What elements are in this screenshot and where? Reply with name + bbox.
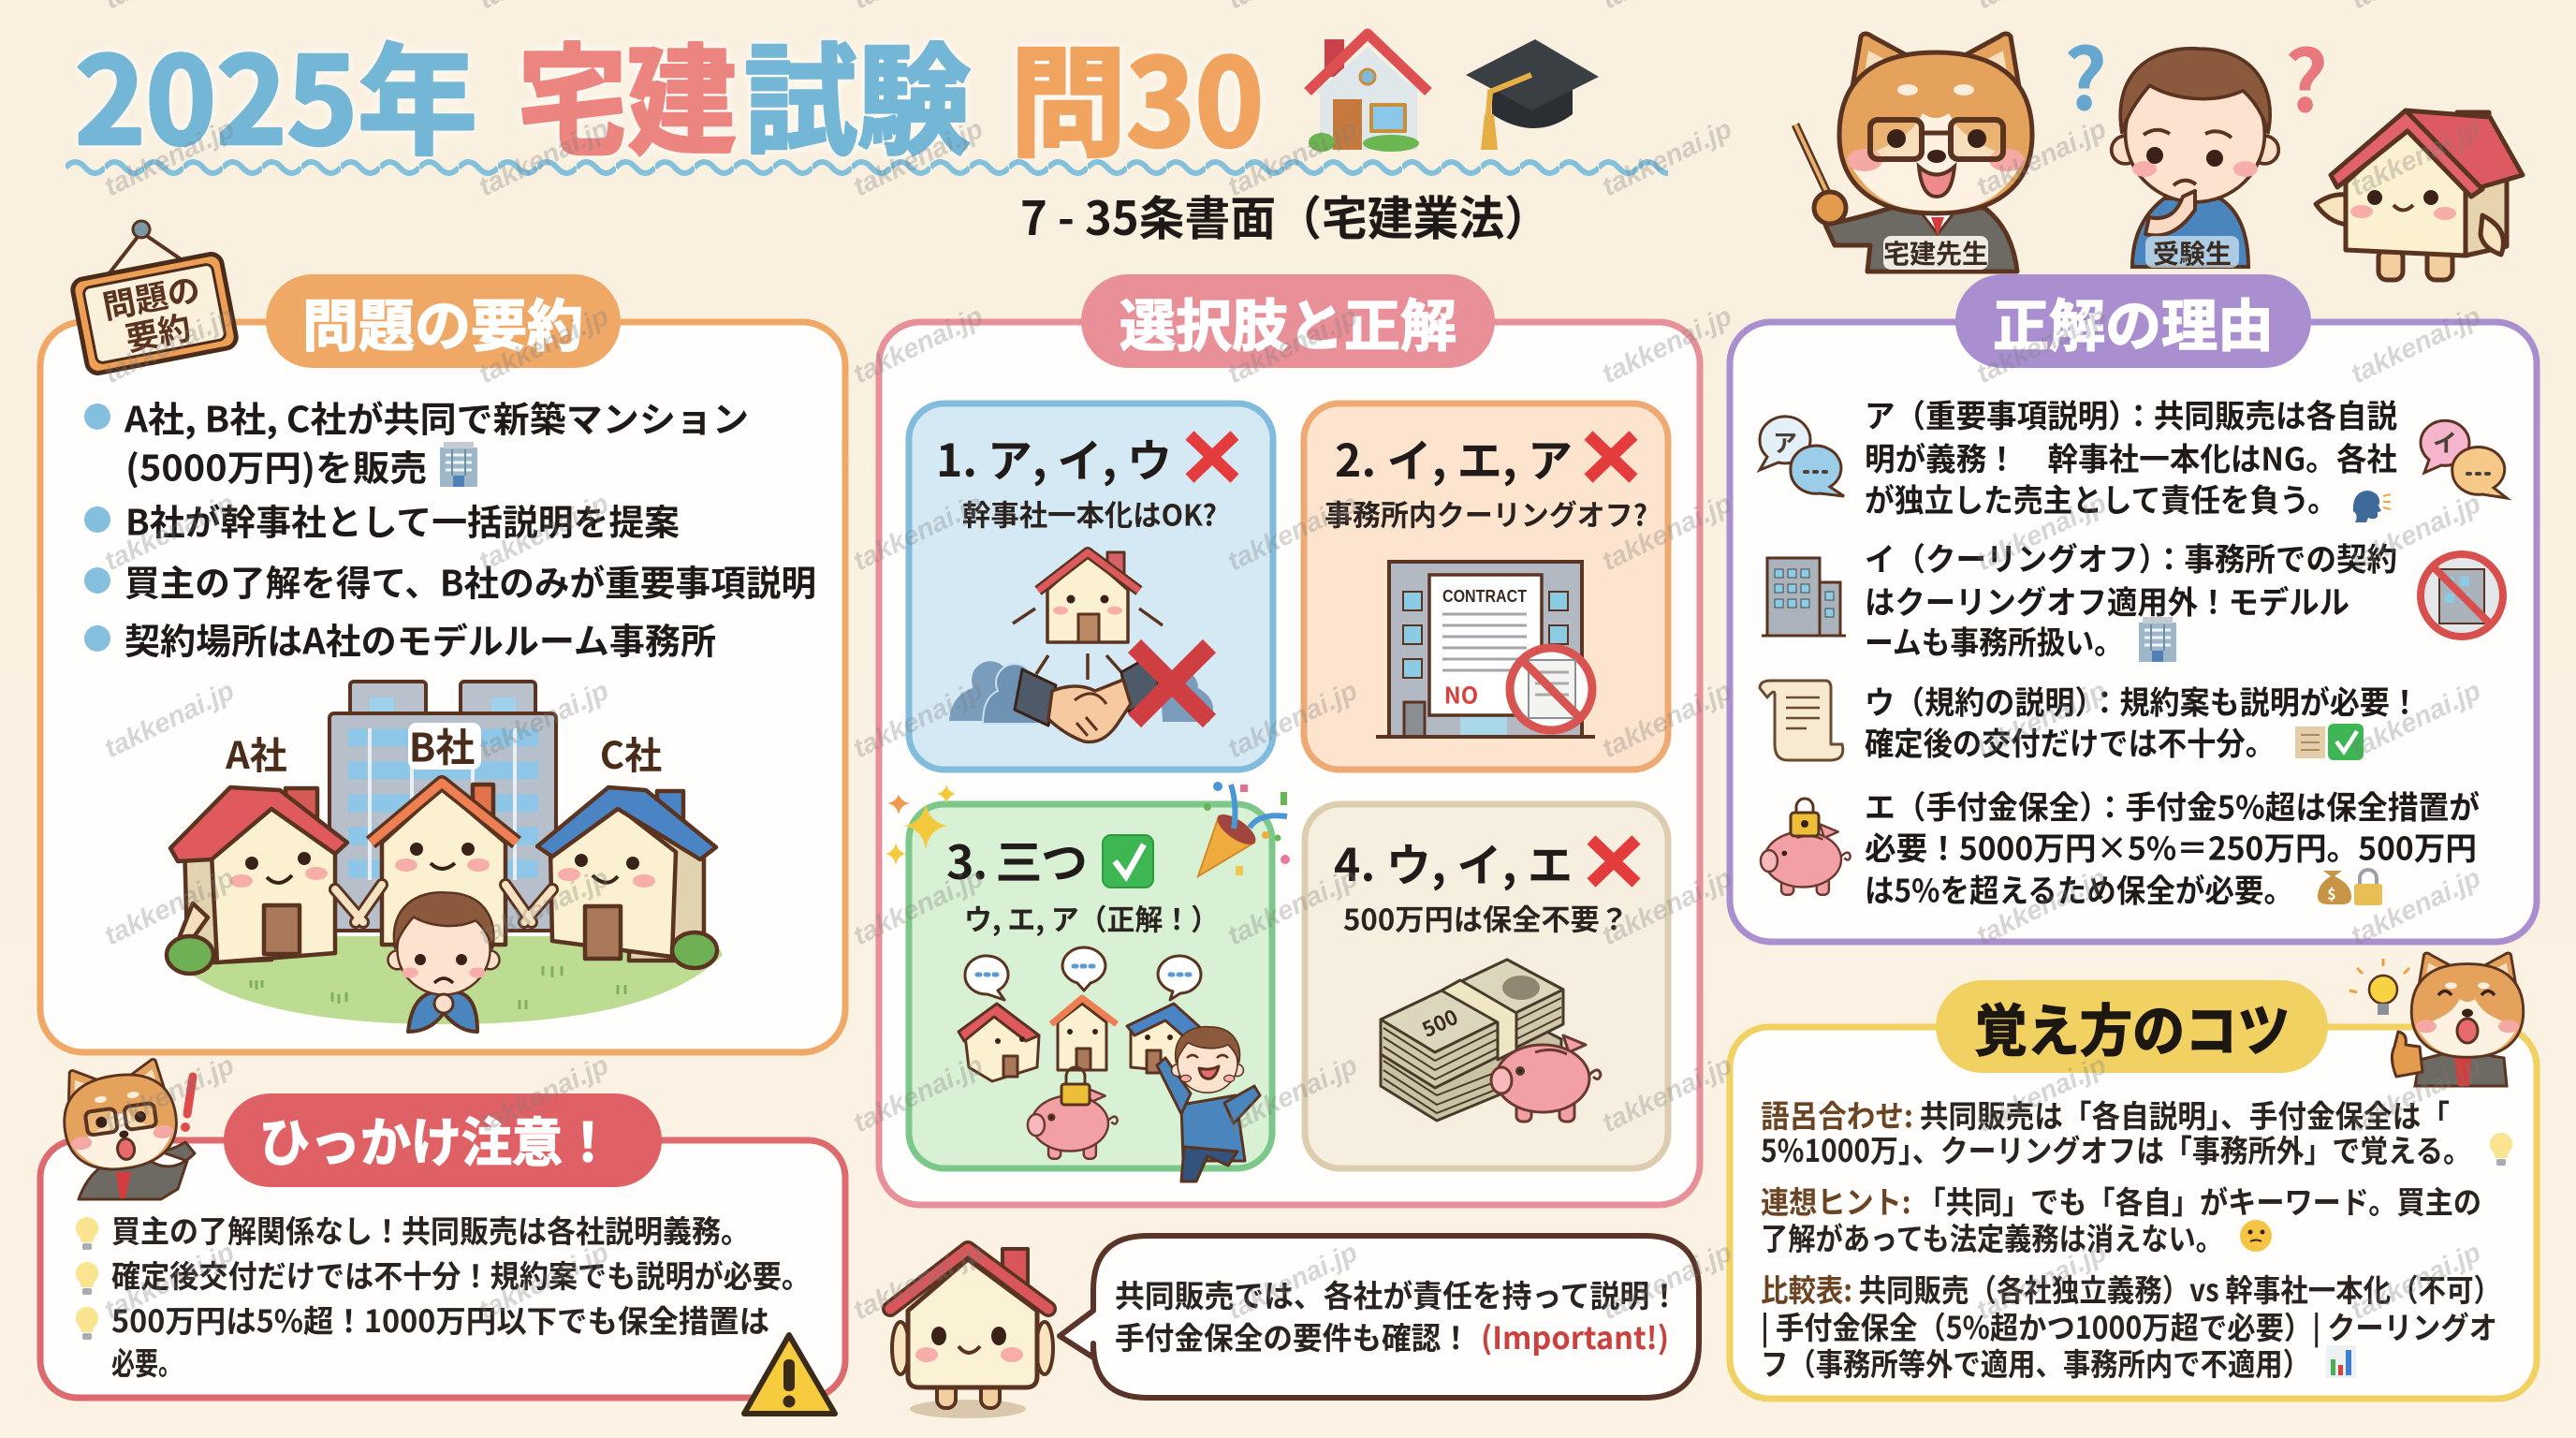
summary bullet list: 買主の了解を得て、B社のみが重要事項説明 [124, 554, 816, 607]
title: 問30 [1010, 7, 1264, 180]
card 4: 4. ウ, イ, エ [1334, 829, 1573, 894]
tips text: 5%1000万」、クーリングオフは「事務所外」で覚える。 [1761, 1126, 2471, 1171]
character: student: 受験生 [2153, 234, 2232, 271]
subtitle: 7 - 35条書面（宅建業法） [1020, 182, 1550, 249]
watermark grid: takkenai.jp [100, 676, 239, 764]
watermark grid: takkenai.jp [1972, 489, 2111, 577]
watermark grid: takkenai.jp [1972, 863, 2111, 951]
red cross [1588, 435, 1633, 478]
watermark grid: takkenai.jp [1223, 489, 1362, 577]
sparkles [886, 785, 956, 865]
watermark grid: takkenai.jp [849, 1050, 988, 1138]
illustration: three companies joint sale: C社 [600, 726, 662, 780]
card 4: 500万円は保全不要？ [1343, 897, 1629, 938]
watermark grid: takkenai.jp [475, 114, 613, 202]
watermark grid: takkenai.jp [1598, 114, 1736, 202]
reason ア: ア（重要事項説明）：共同販売は各自説 [1865, 391, 2397, 436]
reason エ: エ（手付金保全）：手付金5%超は保全措置が [1865, 783, 2480, 828]
watermark grid: takkenai.jp [475, 1238, 613, 1326]
red cross [1591, 840, 1636, 883]
panel: memory tips [1730, 953, 2537, 1399]
icon: green check [1103, 835, 1153, 888]
watermark grid: takkenai.jp [849, 1238, 988, 1326]
reason ウ [1760, 678, 2420, 764]
watermark grid: takkenai.jp [1972, 676, 2111, 764]
watermark grid: takkenai.jp [1223, 863, 1362, 951]
character: talking house [890, 1249, 1053, 1418]
shiba thumbs up with light bulb [2349, 953, 2524, 1086]
tips text [1761, 1092, 2512, 1385]
watermark grid: takkenai.jp [2347, 676, 2485, 764]
card 3 correct answer [886, 782, 1290, 1181]
watermark grid: takkenai.jp [1223, 301, 1362, 389]
reason エ [1761, 783, 2480, 912]
watermark grid: takkenai.jp [100, 489, 239, 577]
trap bullet list: 確定後交付だけでは不十分！規約案でも説明が必要。 [111, 1252, 811, 1297]
watermark grid: takkenai.jp [849, 863, 988, 951]
reason エ: $ [2327, 882, 2336, 904]
illustration: three companies joint sale: A社 [225, 726, 287, 780]
summary bullet list: A社, B社, C社が共同で新築マンション [124, 391, 749, 442]
title [75, 6, 1264, 180]
reason ウ: ウ（規約の説明）：規約案も説明が必要！ [1865, 678, 2420, 723]
card 3 correct answer: 3. 三つ [946, 826, 1088, 893]
house A [167, 787, 347, 974]
watermark grid: takkenai.jp [475, 676, 613, 764]
watermark grid: takkenai.jp [100, 114, 239, 202]
question marks [2064, 12, 2328, 136]
summary heading pill: 問題の要約 [302, 281, 583, 363]
options heading pill: 選択肢と正解 [1120, 281, 1456, 363]
title: 宅建 [518, 6, 737, 178]
reason ア: 明が義務！ 幹事社一本化はNG。各社 [1865, 434, 2397, 479]
watermark grid: takkenai.jp [2347, 301, 2485, 389]
illustration: office contract prohibited [1376, 562, 1595, 737]
reason ア: イ [2433, 425, 2457, 459]
illustration: three companies joint sale [167, 682, 723, 1032]
watermark grid: takkenai.jp [849, 114, 988, 202]
tips heading pill: 覚え方のコツ [1975, 987, 2290, 1067]
card 4 [1305, 804, 1668, 1168]
reasons heading pill: 正解の理由 [1993, 281, 2274, 363]
illustration: handshake and house [949, 552, 1213, 742]
hanging sign: problem summary [71, 221, 238, 375]
watermark grid: takkenai.jp [1223, 676, 1362, 764]
watermark grid: takkenai.jp [100, 863, 239, 951]
tips text: 比較表: 共同販売（各社独立義務）vs 幹事社一本化（不可） [1761, 1266, 2501, 1311]
summary heading pill [266, 274, 621, 368]
speech bubble: (Important!) [1481, 1313, 1669, 1358]
wavy title underline [66, 155, 1668, 180]
character: shiba teacher: 宅建先生 [1883, 234, 1988, 271]
watermark grid: takkenai.jp [1972, 114, 2111, 202]
illustration: money stack and piggy bank [1381, 960, 1601, 1122]
tips text: 語呂合わせ: 共同販売は「各自説明」、手付金保全は「 [1761, 1092, 2450, 1137]
summary bullet list: 契約場所はA社のモデルルーム事務所 [124, 612, 716, 665]
watermark grid: takkenai.jp [1598, 863, 1736, 951]
illustration: office contract prohibited: NO [1444, 678, 1478, 710]
trap bullet list: 買主の了解関係なし！共同販売は各社説明義務。 [111, 1207, 750, 1252]
reason ア: が独立した売主として責任を負う。 [1865, 476, 2337, 521]
reason イ: はクーリングオフ適用外！モデルル [1865, 577, 2349, 624]
trap bullet list: 必要。 [111, 1339, 182, 1384]
watermark grid: takkenai.jp [1223, 1238, 1362, 1326]
watermark grid: takkenai.jp [1598, 489, 1736, 577]
panel: trap warning [40, 1057, 845, 1414]
tips text: 連想ヒント: 「共同」でも「各自」がキーワード。買主の [1761, 1178, 2481, 1223]
card 2: 事務所内クーリングオフ? [1325, 492, 1647, 534]
reason イ [1762, 534, 2503, 663]
panel: reasons for the answer [1730, 274, 2537, 942]
icon: warning triangle [744, 1335, 835, 1414]
character: shiba teacher [1795, 34, 2032, 271]
panel: options and answer [879, 274, 1700, 1205]
house C [537, 787, 717, 968]
trap heading pill: ひっかけ注意！ [259, 1101, 613, 1178]
watermark grid: takkenai.jp [2347, 114, 2485, 202]
watermark grid: takkenai.jp [849, 489, 988, 577]
hanging sign: problem summary: 要約 [121, 301, 195, 360]
trap heading pill [224, 1093, 662, 1187]
illustration: money stack and piggy bank: 500 [1417, 1001, 1462, 1044]
party cracker [1198, 782, 1290, 876]
tips text: フ（事務所等外で適用、事務所内で不適用） [1761, 1340, 2310, 1385]
card 1 [909, 404, 1273, 770]
watermark grid: takkenai.jp [475, 489, 613, 577]
card 3 correct answer: ウ, エ, ア（正解！） [964, 897, 1219, 938]
icon: house emoji [1308, 34, 1428, 152]
reasons heading pill [1955, 274, 2311, 368]
watermark grid: takkenai.jp [2347, 863, 2485, 951]
question marks: ? [2285, 14, 2328, 136]
watermark grid: takkenai.jp [2347, 1050, 2485, 1138]
speech bubble [1060, 1236, 1699, 1398]
watermark grid: takkenai.jp [1223, 1050, 1362, 1138]
character: house mascot [2316, 110, 2523, 280]
question marks: ? [2064, 12, 2107, 134]
reason ア: ア [1773, 425, 1797, 459]
watermark grid: takkenai.jp [1223, 114, 1362, 202]
watermark grid: takkenai.jp [1598, 676, 1736, 764]
summary bullet list [84, 391, 816, 665]
summary bullet list: B社が幹事社として一括説明を提案 [125, 494, 680, 545]
watermark grid: takkenai.jp [1598, 301, 1736, 389]
watermark grid: takkenai.jp [100, 1238, 239, 1326]
summary bullet list: (5000万円)を販売 [125, 440, 427, 491]
reason エ: は5%を超えるため保全が必要。 [1865, 865, 2293, 912]
card 2: 2. イ, エ, ア [1335, 424, 1573, 490]
watermark grid: takkenai.jp [849, 676, 988, 764]
title: 2025年 [75, 6, 477, 178]
watermark grid: takkenai.jp [475, 301, 613, 389]
illustration: three companies joint sale: B社 [409, 717, 475, 773]
watermark grid: takkenai.jp [475, 863, 613, 951]
tips text: 了解があっても法定義務は消えない。 [1761, 1214, 2223, 1259]
watermark grid: takkenai.jp [1972, 1238, 2111, 1326]
watermark grid: takkenai.jp [2347, 489, 2485, 577]
reason エ: 必要！5000万円×5%＝250万円。500万円 [1865, 824, 2477, 869]
tips text: | 手付金保全（5%超かつ1000万超で必要）| クーリングオ [1761, 1303, 2497, 1348]
title: 試験 [744, 6, 971, 178]
icon: graduation cap [1466, 39, 1599, 150]
watermark grid: takkenai.jp [1972, 301, 2111, 389]
reason ウ: 確定後の交付だけでは不十分。 [1865, 719, 2275, 764]
watermark grid: takkenai.jp [100, 301, 239, 389]
card 1: 1. ア, イ, ウ [936, 424, 1172, 490]
watermark grid: takkenai.jp [1598, 1238, 1736, 1326]
trap bullet list [76, 1207, 811, 1384]
illustration: cooperating houses, piggy, happy student [959, 947, 1260, 1181]
house B [371, 783, 517, 945]
worried boy [388, 892, 500, 1032]
watermark grid: takkenai.jp [2347, 1238, 2485, 1326]
watermark grid: takkenai.jp [849, 301, 988, 389]
trap bullet list: 500万円は5%超！1000万円以下でも保全措置は [111, 1297, 769, 1342]
hanging sign: problem summary: 問題の [98, 263, 204, 329]
speech bubble: 共同販売では、各社が責任を持って説明！ [1115, 1271, 1679, 1316]
illustration: office contract prohibited: CONTRACT [1442, 587, 1527, 606]
watermark grid: takkenai.jp [1972, 1050, 2111, 1138]
red cross [1190, 435, 1235, 478]
reason イ: イ（クーリングオフ）：事務所での契約 [1865, 534, 2397, 580]
card 2 [1304, 404, 1668, 770]
speech bubble: 手付金保全の要件も確認！ [1115, 1313, 1471, 1358]
character: student [2112, 49, 2278, 271]
panel: problem summary [40, 221, 845, 1052]
card 1: 幹事社一本化はOK? [962, 492, 1217, 534]
reason ア [1760, 391, 2507, 522]
watermark grid: takkenai.jp [1598, 1050, 1736, 1138]
watermark grid: takkenai.jp [475, 1050, 613, 1138]
shiba surprised [57, 1057, 195, 1199]
watermark grid: takkenai.jp [100, 1050, 239, 1138]
reason イ: ームも事務所扱い。 [1865, 618, 2123, 663]
